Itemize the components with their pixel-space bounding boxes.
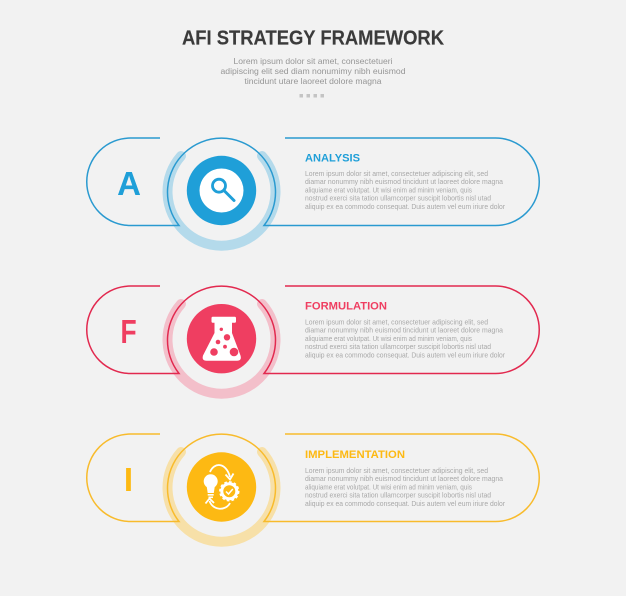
body text: formulation: aliquiame erat volutpat. Ut wisi enim ad minim veniam, quis: [305, 334, 472, 343]
body text: analysis: aliquip ex ea commodo consequat. Duis autem vel eum iriure dolor: [305, 202, 506, 211]
panel: formulation: [87, 286, 539, 394]
pale ring: analysis: [168, 156, 276, 246]
letter F: F: [120, 314, 137, 351]
body text: analysis: aliquiame erat volutpat. Ut wisi enim ad minim veniam, quis: [305, 185, 472, 194]
body text: analysis: Lorem ipsum dolor sit amet, consectetuer adipiscing elit, sed: [305, 169, 488, 178]
letter A: A: [117, 165, 141, 202]
body text: implementation: nostrud exerci sita tation ullamcorper suscipit lobortis nisl utad: [305, 491, 491, 500]
subtitle text: tincidunt utare laoreet dolore magna: [244, 76, 382, 86]
subtitle text: Lorem ipsum dolor sit amet, consectetueri: [234, 56, 393, 66]
body text: implementation: [305, 466, 506, 508]
outline: formulation: [87, 286, 539, 374]
body text: formulation: nostrud exerci sita tation ullamcorper suscipit lobortis nisl utad: [305, 342, 491, 351]
icon: idea to gear cycle: [187, 452, 256, 522]
body text: formulation: aliquip ex ea commodo consequat. Duis autem vel eum iriure dolor: [305, 350, 506, 359]
subtitle text: adipiscing elit sed diam nonumimy nibh euismod: [220, 66, 406, 76]
body text: formulation: [305, 318, 506, 359]
header dots: [300, 94, 324, 98]
icon: magnifier: [187, 156, 256, 225]
body text: implementation: aliquip ex ea commodo consequat. Duis autem vel eum iriure dolor: [305, 499, 506, 508]
panel: implementation: [87, 434, 539, 542]
body text: formulation: Lorem ipsum dolor sit amet, consectetuer adipiscing elit, sed: [305, 318, 488, 326]
heading: implementation: IMPLEMENTATION: [305, 449, 405, 461]
body text: analysis: [305, 169, 506, 211]
panel: analysis: [87, 138, 539, 246]
heading: formulation: FORMULATION: [305, 300, 387, 312]
body text: analysis: nostrud exerci sita tation ullamcorper suscipit lobortis nisl utad: [305, 194, 491, 203]
body text: formulation: diamar nonummy nibh euismod tincidunt ut laoreet dolore magna: [305, 326, 503, 335]
body text: implementation: aliquiame erat volutpat. Ut wisi enim ad minim veniam, quis: [305, 482, 472, 491]
heading: analysis: ANALYSIS: [305, 152, 360, 164]
subtitle text: [220, 56, 406, 86]
outline: analysis: [87, 138, 539, 226]
title: AFI STRATEGY FRAMEWORK: [182, 28, 445, 50]
outline: implementation: [87, 434, 539, 522]
body text: analysis: diamar nonummy nibh euismod tincidunt ut laoreet dolore magna: [305, 177, 503, 186]
pale ring: formulation: [168, 304, 276, 394]
pale ring: implementation: [168, 452, 276, 542]
body text: implementation: diamar nonummy nibh euismod tincidunt ut laoreet dolore magna: [305, 474, 503, 483]
body text: implementation: Lorem ipsum dolor sit amet, consectetuer adipiscing elit, sed: [305, 466, 488, 475]
icon: flask: [187, 304, 256, 373]
letter I: I: [124, 461, 133, 498]
